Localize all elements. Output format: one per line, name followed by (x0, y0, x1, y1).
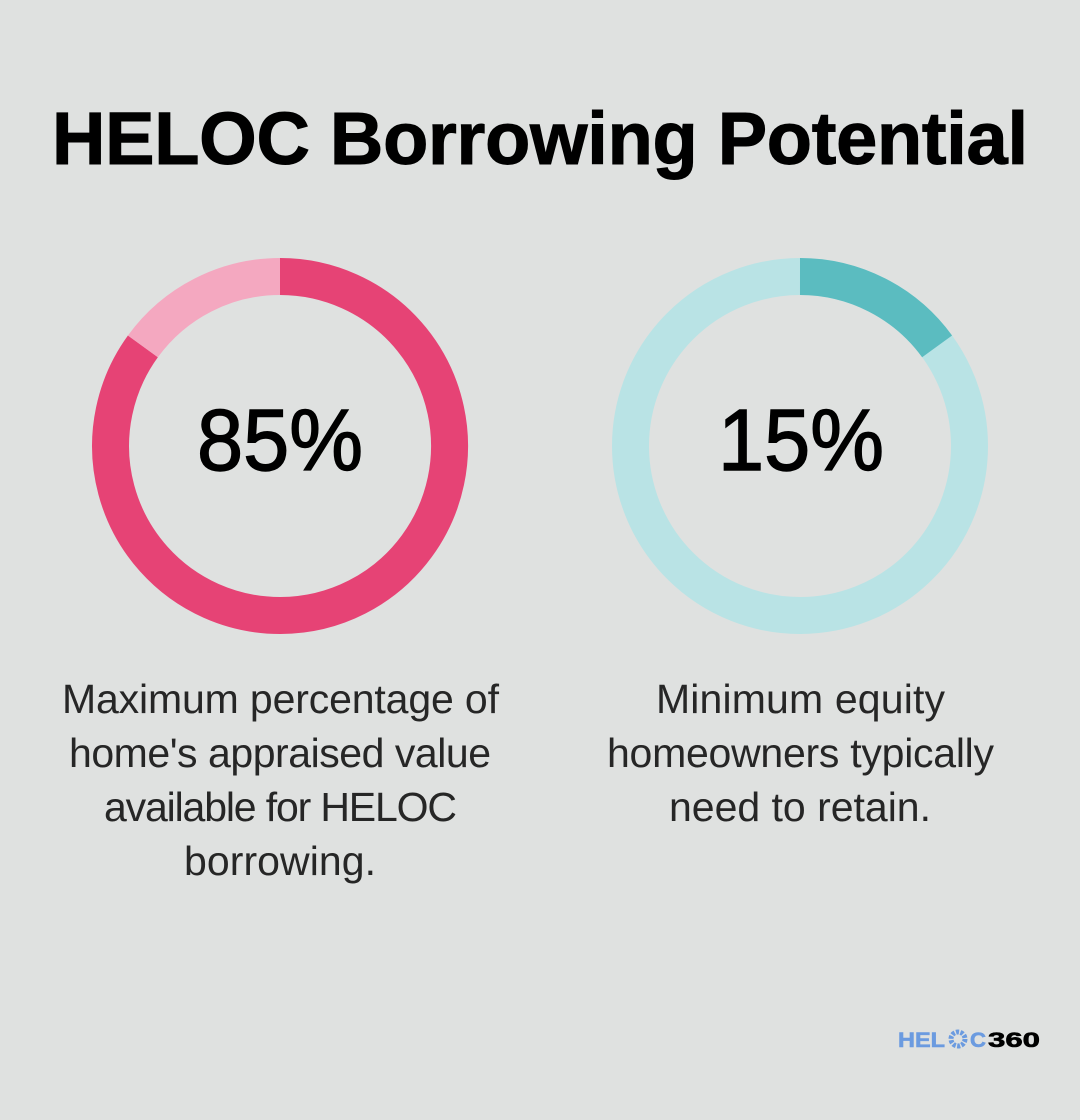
description: 85 percent: borrowing. (184, 838, 376, 884)
description: 15 percent: Minimum equity (656, 676, 946, 722)
description: 85 percent: Maximum percentage of (62, 676, 500, 722)
description: 85 percent: home's appraised value (69, 730, 491, 776)
panel: 15 percent stat (607, 276, 994, 830)
logo: HELOC360: HEL (898, 1029, 945, 1052)
description: 85 percent (62, 676, 500, 884)
donut chart: 15 percent (630, 276, 970, 616)
description: 15 percent: need to retain. (669, 784, 931, 830)
logo: HELOC360: 360 (988, 1029, 1040, 1052)
logo: HELOC360: C (970, 1029, 986, 1052)
panel: 85 percent stat (62, 276, 500, 884)
donut chart: 85 percent (111, 276, 450, 616)
title: HELOC Borrowing Potential (52, 97, 1028, 180)
description: 85 percent: available for HELOC (104, 784, 457, 830)
description: 15 percent (607, 676, 994, 830)
description: 15 percent: homeowners typically (607, 730, 994, 776)
value: 85%: 85% (197, 392, 363, 489)
logo: HELOC360 (898, 1029, 1040, 1052)
value: 15%: 15% (718, 392, 884, 489)
